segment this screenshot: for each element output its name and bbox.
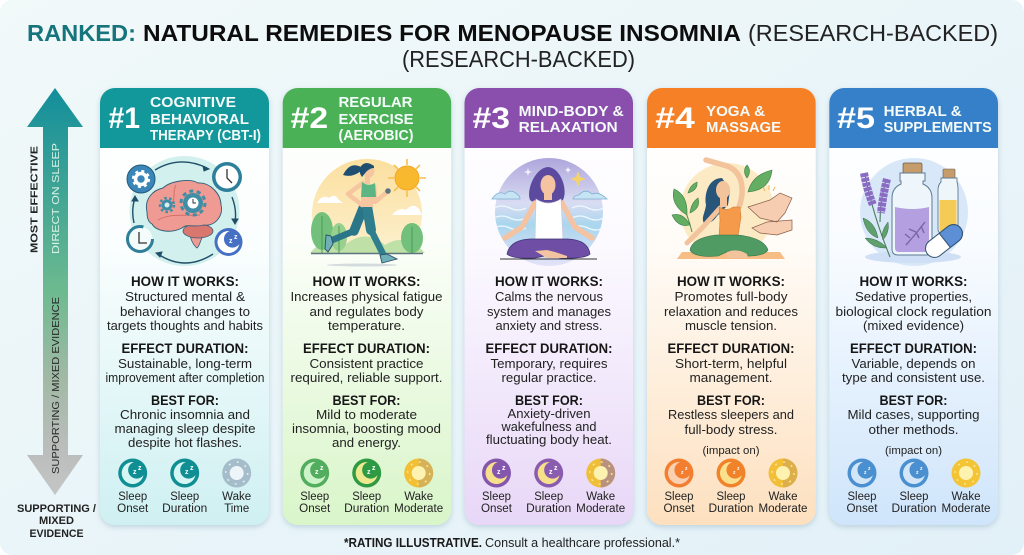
ratings: #4 <box>664 458 808 515</box>
arrow bottom label: MIXED <box>39 515 74 527</box>
effectiveness arrow: DIRECT ON SLEEP <box>50 143 62 254</box>
text: effect duration: EFFECT DURATION: <box>122 341 248 356</box>
text: how it works <box>664 274 798 333</box>
illustration: brain and cycle: z <box>234 234 238 241</box>
text: best for: Restless sleepers and <box>668 408 794 422</box>
text: how it works <box>107 274 263 333</box>
text: best for: full-body stress. <box>684 423 778 437</box>
ratings: #3 <box>481 458 625 515</box>
ratings: #4: z <box>737 466 740 472</box>
effectiveness arrow: SUPPORTING / MIXED EVIDENCE <box>50 297 62 474</box>
ratings: #3: z <box>497 469 501 476</box>
header: #3: MIND-BODY & <box>519 104 624 120</box>
header: #1: #1 <box>108 102 140 135</box>
ratings: #3: z <box>549 469 553 476</box>
ratings: #2: z <box>320 465 324 472</box>
text: best for: (impact on) <box>885 445 942 457</box>
text: effect duration <box>842 341 985 385</box>
text: best for: other methods. <box>868 423 958 437</box>
text: best for <box>114 393 256 450</box>
ratings: #5: Moderate <box>942 503 990 515</box>
panel: #5 Herbal and supplements <box>829 88 998 525</box>
text: best for <box>848 393 980 457</box>
ratings: #2: Duration <box>344 503 389 515</box>
effectiveness arrow <box>27 88 83 495</box>
header: #4 <box>647 88 816 148</box>
text: how it works: HOW IT WORKS: <box>495 274 603 289</box>
text: how it works: and regulates body <box>310 305 424 319</box>
title <box>27 20 998 72</box>
text: best for <box>486 393 612 447</box>
header: #5: SUPPLEMENTS <box>884 120 992 136</box>
text: how it works: Promotes full-body <box>674 290 788 304</box>
ratings: #4: z <box>685 466 688 472</box>
ratings: #1: z <box>138 465 142 472</box>
header: #5: #5 <box>837 102 875 135</box>
text: best for: Anxiety-driven <box>508 407 591 421</box>
header: #3 <box>464 88 633 148</box>
text: effect duration: required, reliable support. <box>290 371 442 385</box>
ratings: #4: Sleep <box>716 491 746 503</box>
text: effect duration <box>106 341 265 385</box>
ratings: #3: z <box>554 465 558 472</box>
text: best for: BEST FOR: <box>332 393 400 408</box>
text: best for: (impact on) <box>702 445 760 457</box>
header: #1 <box>100 88 269 148</box>
header: #2 <box>283 88 451 148</box>
ratings: #5: Duration <box>892 503 936 515</box>
text: how it works <box>290 274 443 333</box>
text: effect duration: type and consistent use. <box>842 371 985 385</box>
text: how it works: (mixed evidence) <box>863 319 964 333</box>
ratings: #1: Sleep <box>118 491 147 503</box>
text: best for <box>292 393 441 450</box>
ratings: #5: Sleep <box>900 491 928 503</box>
ratings: #2: Moderate <box>394 503 443 515</box>
footnote: *RATING ILLUSTRATIVE. <box>344 536 482 550</box>
text: effect duration: improvement after completion <box>106 371 265 385</box>
text: how it works <box>836 274 992 333</box>
header: #1: THERAPY (CBT-I) <box>150 128 261 144</box>
ratings: #5: z <box>868 466 871 472</box>
ratings: #1: z <box>185 469 189 476</box>
ratings: #4: Wake <box>768 491 798 503</box>
header: #5: HERBAL & <box>884 104 962 120</box>
text: how it works: Sedative properties, <box>855 290 972 304</box>
text: effect duration: management. <box>690 371 772 385</box>
text: how it works: biological clock regulation <box>836 305 992 319</box>
text: how it works: HOW IT WORKS: <box>131 274 239 289</box>
text: effect duration: EFFECT DURATION: <box>850 341 977 356</box>
ratings: #3: Sleep <box>534 491 563 503</box>
text: how it works <box>487 274 611 333</box>
text: best for: BEST FOR: <box>880 393 948 408</box>
text: best for: managing sleep despite <box>114 422 256 436</box>
text: effect duration <box>486 341 612 385</box>
illustration: herbs, bottles and capsule <box>860 158 968 266</box>
header: #4: YOGA & <box>706 104 766 120</box>
ratings: #3: z <box>502 465 506 472</box>
text: best for: Chronic insomnia and <box>120 408 250 422</box>
text: effect duration: EFFECT DURATION: <box>303 341 430 356</box>
ratings: #2: z <box>372 465 376 472</box>
ratings: #1: Wake <box>222 491 251 503</box>
illustration: yoga and massage <box>672 160 792 259</box>
text: how it works: HOW IT WORKS: <box>677 274 785 289</box>
header: #5 <box>829 88 998 148</box>
illustration: runner <box>310 159 426 269</box>
panel: #1 CBT-I <box>100 88 269 525</box>
illustration: brain and cycle <box>127 156 242 266</box>
header: #1: BEHAVIORAL <box>150 112 249 128</box>
ratings: #1 <box>117 458 251 515</box>
ratings: #2: Sleep <box>352 491 381 503</box>
text: best for: Mild cases, supporting <box>848 408 980 422</box>
text: best for: fluctuating body heat. <box>486 433 612 447</box>
ratings: #5: z <box>864 470 867 476</box>
ratings: #5 <box>846 458 990 515</box>
ratings: #2: Wake <box>404 491 433 503</box>
text: best for: insomnia, boosting mood <box>292 422 441 436</box>
ratings: #5: Onset <box>846 503 878 515</box>
ratings: #4: Sleep <box>664 491 694 503</box>
arrow bottom label: EVIDENCE <box>30 528 84 540</box>
header: #4: MASSAGE <box>706 120 781 136</box>
title: (RESEARCH-BACKED) <box>402 46 635 72</box>
text: how it works: Calms the nervous <box>495 290 603 304</box>
header: #3: RELAXATION <box>519 120 618 136</box>
text: best for: despite hot flashes. <box>128 436 242 450</box>
text: best for <box>668 393 794 457</box>
ratings: #3: Wake <box>586 491 615 503</box>
ratings: #1: Onset <box>117 503 149 515</box>
ratings: #2: Sleep <box>300 491 329 503</box>
illustration: meditation <box>492 158 607 266</box>
text: best for: BEST FOR: <box>515 393 583 408</box>
text: effect duration: Consistent practice <box>310 357 424 371</box>
title: (RESEARCH-BACKED) <box>748 20 998 46</box>
text: effect duration: regular practice. <box>502 371 596 385</box>
panel: #3 Mind-body <box>464 88 633 525</box>
ratings: #3: Sleep <box>482 491 511 503</box>
text: effect duration: Variable, depends on <box>852 357 976 371</box>
ratings: #4: Onset <box>664 503 695 515</box>
text: how it works: Structured mental & <box>125 290 246 304</box>
ratings: #3: Moderate <box>576 503 625 515</box>
text: best for: BEST FOR: <box>697 393 765 408</box>
ratings: #5: z <box>916 470 919 476</box>
text: how it works: system and manages <box>487 305 611 319</box>
text: how it works: muscle tension. <box>685 319 777 333</box>
text: how it works: targets thoughts and habits <box>107 319 263 333</box>
header: #3: #3 <box>472 102 510 135</box>
ratings: #5: Wake <box>952 491 980 503</box>
text: best for: and energy. <box>332 436 401 450</box>
text: effect duration <box>668 341 794 385</box>
title: NATURAL REMEDIES FOR MENOPAUSE INSOMNIA <box>143 20 741 46</box>
ratings: #1: z <box>133 469 137 476</box>
ratings: #3: Onset <box>481 503 513 515</box>
panel: #4 Yoga and massage <box>647 88 816 525</box>
arrow bottom label: SUPPORTING / <box>17 503 96 515</box>
text: how it works: anxiety and stress. <box>496 319 602 333</box>
ratings: #5: z <box>920 466 923 472</box>
header: #2: REGULAR <box>338 95 413 111</box>
text: effect duration: Temporary, requires <box>490 357 608 371</box>
footnote: Consult a healthcare professional.* <box>485 536 680 550</box>
header: #1: COGNITIVE <box>150 95 236 111</box>
text: how it works: HOW IT WORKS: <box>312 274 420 289</box>
title: RANKED: <box>27 20 136 46</box>
text: how it works: Increases physical fatigue <box>290 290 443 304</box>
ratings: #4: z <box>681 470 684 476</box>
ratings: #3: Duration <box>526 503 571 515</box>
ratings: #2: Onset <box>299 503 331 515</box>
header: #2: #2 <box>291 102 328 135</box>
ratings: #2 <box>299 458 443 515</box>
arrow bottom label <box>17 503 96 540</box>
ratings: #2: z <box>367 469 371 476</box>
header: #4: #4 <box>655 102 695 135</box>
footnote <box>344 536 680 550</box>
text: best for: wakefulness and <box>500 420 597 434</box>
ratings: #4: z <box>733 470 736 476</box>
text: effect duration: EFFECT DURATION: <box>486 341 612 356</box>
header: #2: EXERCISE <box>338 112 414 128</box>
ratings: #1: Sleep <box>170 491 199 503</box>
ratings: #1: Duration <box>162 503 207 515</box>
text: effect duration: EFFECT DURATION: <box>668 341 794 356</box>
illustration: brain and cycle: z <box>229 238 233 245</box>
effectiveness arrow: MOST EFFECTIVE <box>28 146 40 253</box>
ratings: #5: Sleep <box>848 491 876 503</box>
text: how it works: behavioral changes to <box>120 305 250 319</box>
text: best for: BEST FOR: <box>151 393 219 408</box>
ratings: #2: z <box>315 469 319 476</box>
text: best for: Mild to moderate <box>316 408 417 422</box>
ratings: #1: Time <box>224 503 249 515</box>
ratings: #1: z <box>190 465 194 472</box>
text: effect duration <box>290 341 442 385</box>
header: #2: (AEROBIC) <box>338 128 414 144</box>
text: how it works: HOW IT WORKS: <box>860 274 968 289</box>
ratings: #4: Moderate <box>758 503 808 515</box>
panel: #2 Regular exercise <box>283 88 451 525</box>
text: effect duration: Sustainable, long-term <box>118 357 252 371</box>
text: effect duration: Short-term, helpful <box>675 357 787 371</box>
ratings: #4: Duration <box>708 503 754 515</box>
text: how it works: relaxation and reduces <box>664 305 798 319</box>
text: how it works: temperature. <box>328 319 405 333</box>
